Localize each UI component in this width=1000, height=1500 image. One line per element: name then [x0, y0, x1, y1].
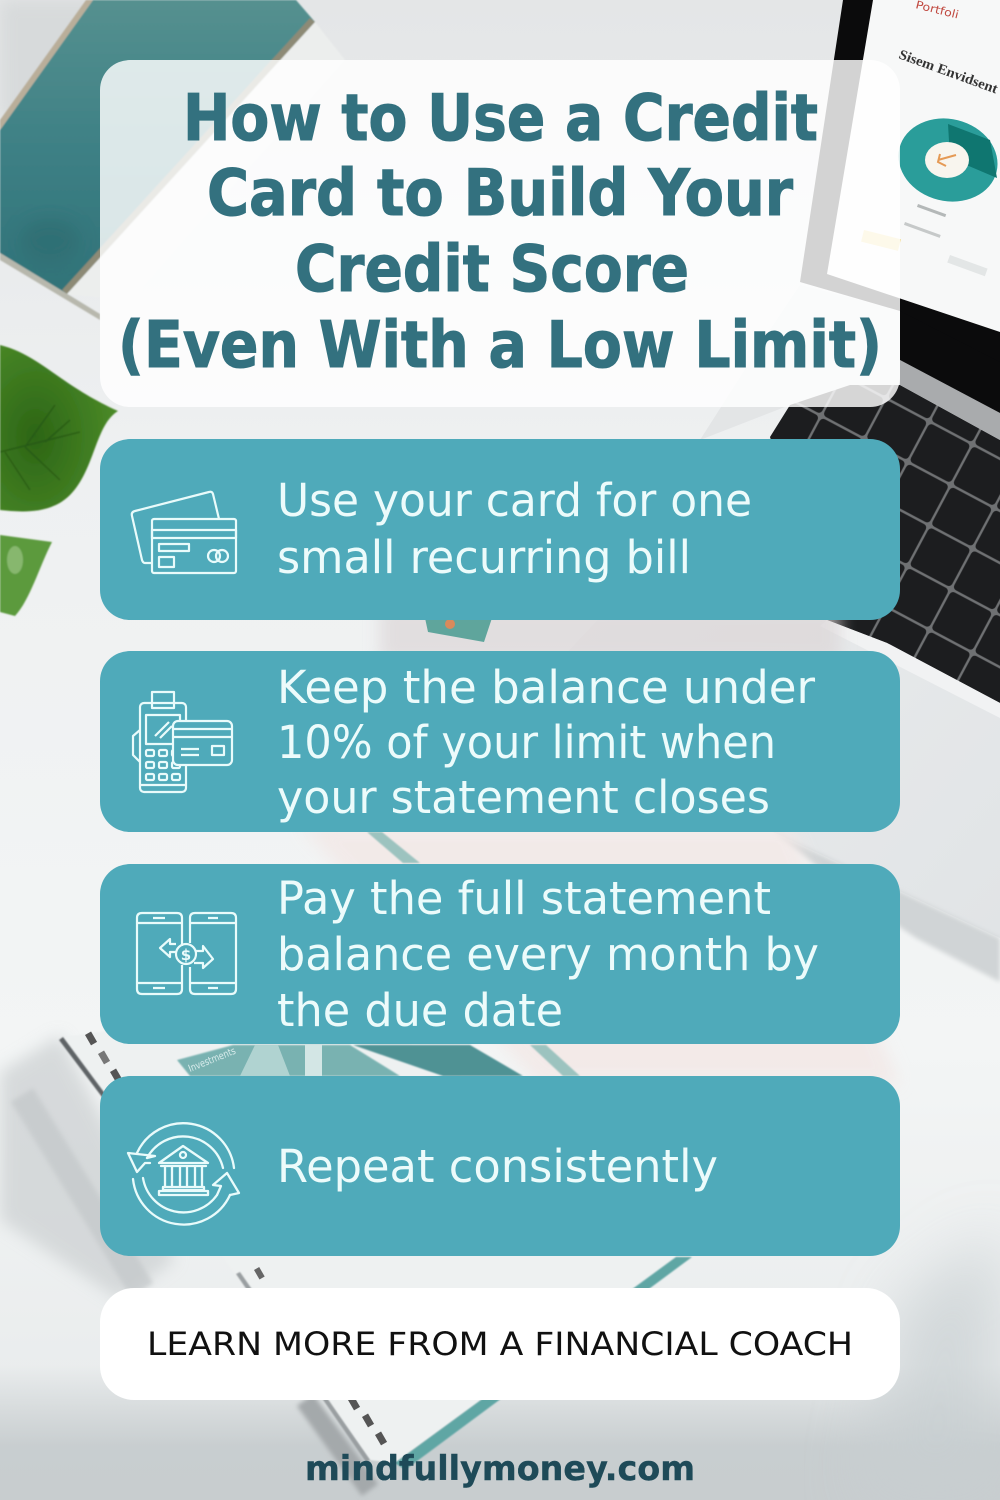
notebook top left — [0, 0, 345, 320]
website footer: mindfullymoney.com — [305, 1449, 695, 1489]
pink reflections — [380, 605, 840, 662]
card between panels — [425, 618, 492, 642]
laptop — [560, 0, 1000, 982]
icon: phones transferring money — [137, 913, 236, 994]
step 1 text — [277, 474, 752, 584]
step 2 text: your statement closes — [277, 771, 770, 824]
step 2 text: Keep the balance under — [277, 661, 815, 714]
step 1 panel — [100, 439, 900, 620]
call to action text: LEARN MORE FROM A FINANCIAL COACH — [147, 1325, 853, 1363]
spiral notebook — [22, 832, 692, 1490]
call to action button — [100, 1288, 900, 1400]
title heading: Card to Build Your — [207, 157, 793, 231]
step 2 text: 10% of your limit when — [277, 716, 776, 769]
title heading: How to Use a Credit — [183, 82, 818, 156]
screen chart: donut — [890, 108, 1000, 212]
step 3 text: Pay the full statement — [277, 872, 771, 925]
left and floor shadows — [0, 1035, 175, 1300]
laptop: Sisem Envidsent — [897, 48, 1000, 97]
leaves — [0, 345, 118, 616]
screen — [827, 0, 1000, 332]
marble top left — [0, 0, 100, 120]
icon: dollar sign: $ — [181, 946, 191, 964]
icon: bank with circular arrows — [128, 1123, 239, 1225]
palm rest — [560, 437, 1000, 938]
step 1 text: small recurring bill — [277, 531, 691, 584]
step 3 text: the due date — [277, 984, 563, 1037]
title heading: Credit Score — [295, 233, 689, 307]
step 3 text: balance every month by — [277, 928, 819, 981]
step 1 text: Use your card for one — [277, 474, 752, 527]
step 3 text — [277, 872, 819, 1037]
step 2 panel — [100, 651, 900, 832]
screen bezel — [800, 0, 1000, 362]
step 2 text — [277, 661, 815, 824]
title heading — [118, 82, 882, 383]
silver deck behind title panel — [700, 285, 900, 440]
title heading: (Even With a Low Limit) — [118, 309, 882, 383]
icon: credit cards — [132, 492, 236, 573]
step 3 panel — [100, 864, 900, 1044]
spiral notebook: Investments — [187, 1046, 237, 1075]
step 4 panel — [100, 1076, 900, 1256]
title panel — [100, 60, 900, 407]
step 4 text: Repeat consistently — [277, 1140, 718, 1193]
keyboard — [770, 385, 1000, 703]
icon: card terminal — [133, 692, 232, 792]
